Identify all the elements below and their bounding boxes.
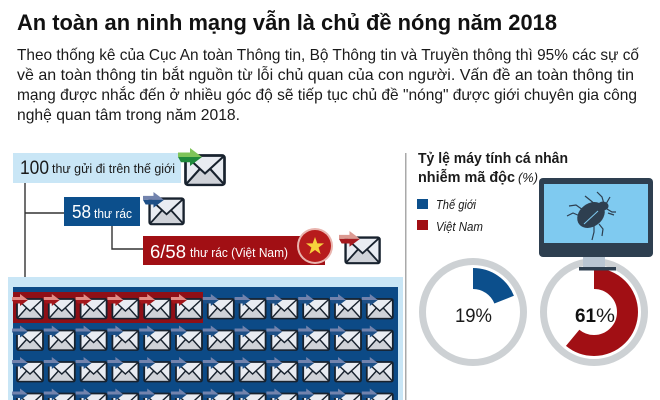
- legend: Thế giới: [436, 197, 477, 212]
- box: 6/58 spam Vietnam: thư rác (Việt Nam): [190, 246, 288, 260]
- icon: blue arrow envelope: [143, 192, 184, 224]
- box: 6/58 spam Vietnam: 6/58: [150, 242, 186, 262]
- row 2 envelopes: [12, 326, 393, 350]
- intro paragraph: Theo thống kê của Cục An toàn Thông tin, Bộ Thông tin và Truyền thông thì 95% các sự cố: [17, 47, 639, 64]
- chart heading: [418, 151, 568, 186]
- intro paragraph: nghệ quan tâm trong năm 2018.: [17, 107, 240, 124]
- icon: monitor with bug: [539, 178, 653, 270]
- box: 58 spam: [64, 197, 140, 226]
- icon: green arrow envelope: [178, 148, 224, 185]
- donut: Vietnam 61%: %: [596, 306, 615, 327]
- intro paragraph: mạng được nhắc đến ở nhiều góc độ sẽ tiếp tục chủ đề "nóng" được giới chuyên gia công: [17, 85, 637, 104]
- chart heading: (%): [518, 170, 538, 185]
- row 4 envelopes: [12, 388, 393, 400]
- donut: Vietnam 61%: 61: [575, 306, 596, 327]
- divider: [405, 153, 406, 400]
- donut: world 19%: [422, 262, 524, 362]
- tree connectors: [25, 182, 143, 280]
- icon: red arrow envelope: [339, 231, 380, 263]
- donut: Vietnam 61%: [544, 262, 644, 362]
- bug: [567, 192, 616, 240]
- box: 100 emails worldwide: thư gửi đi trên thế giới: [52, 162, 175, 176]
- panel: email grid: [8, 277, 403, 400]
- chart heading: Tỷ lệ máy tính cá nhân: [418, 151, 568, 167]
- legend: [417, 197, 483, 234]
- box: 6/58 spam Vietnam: [143, 236, 325, 265]
- icon: Vietnam flag: [297, 228, 333, 264]
- box: 100 emails worldwide: 100: [20, 158, 49, 179]
- row 1: six red and six blue envelopes: [12, 294, 393, 318]
- legend: Việt Nam: [436, 219, 483, 234]
- donut: world 19%: 19%: [455, 306, 492, 327]
- red highlight band: [13, 292, 203, 323]
- row 3 envelopes: [12, 357, 393, 382]
- box: 58 spam: 58: [72, 202, 91, 222]
- box: 100 emails worldwide: [13, 153, 181, 183]
- intro paragraph: [17, 47, 639, 124]
- box: 58 spam: thư rác: [94, 207, 132, 221]
- chart heading: nhiễm mã độc: [418, 169, 515, 186]
- intro paragraph: về an toàn thông tin bắt nguồn từ lỗi chủ quan của con người. Vấn đề an toàn thông tin: [17, 65, 634, 84]
- title: An toàn an ninh mạng vẫn là chủ đề nóng năm 2018: [17, 10, 557, 35]
